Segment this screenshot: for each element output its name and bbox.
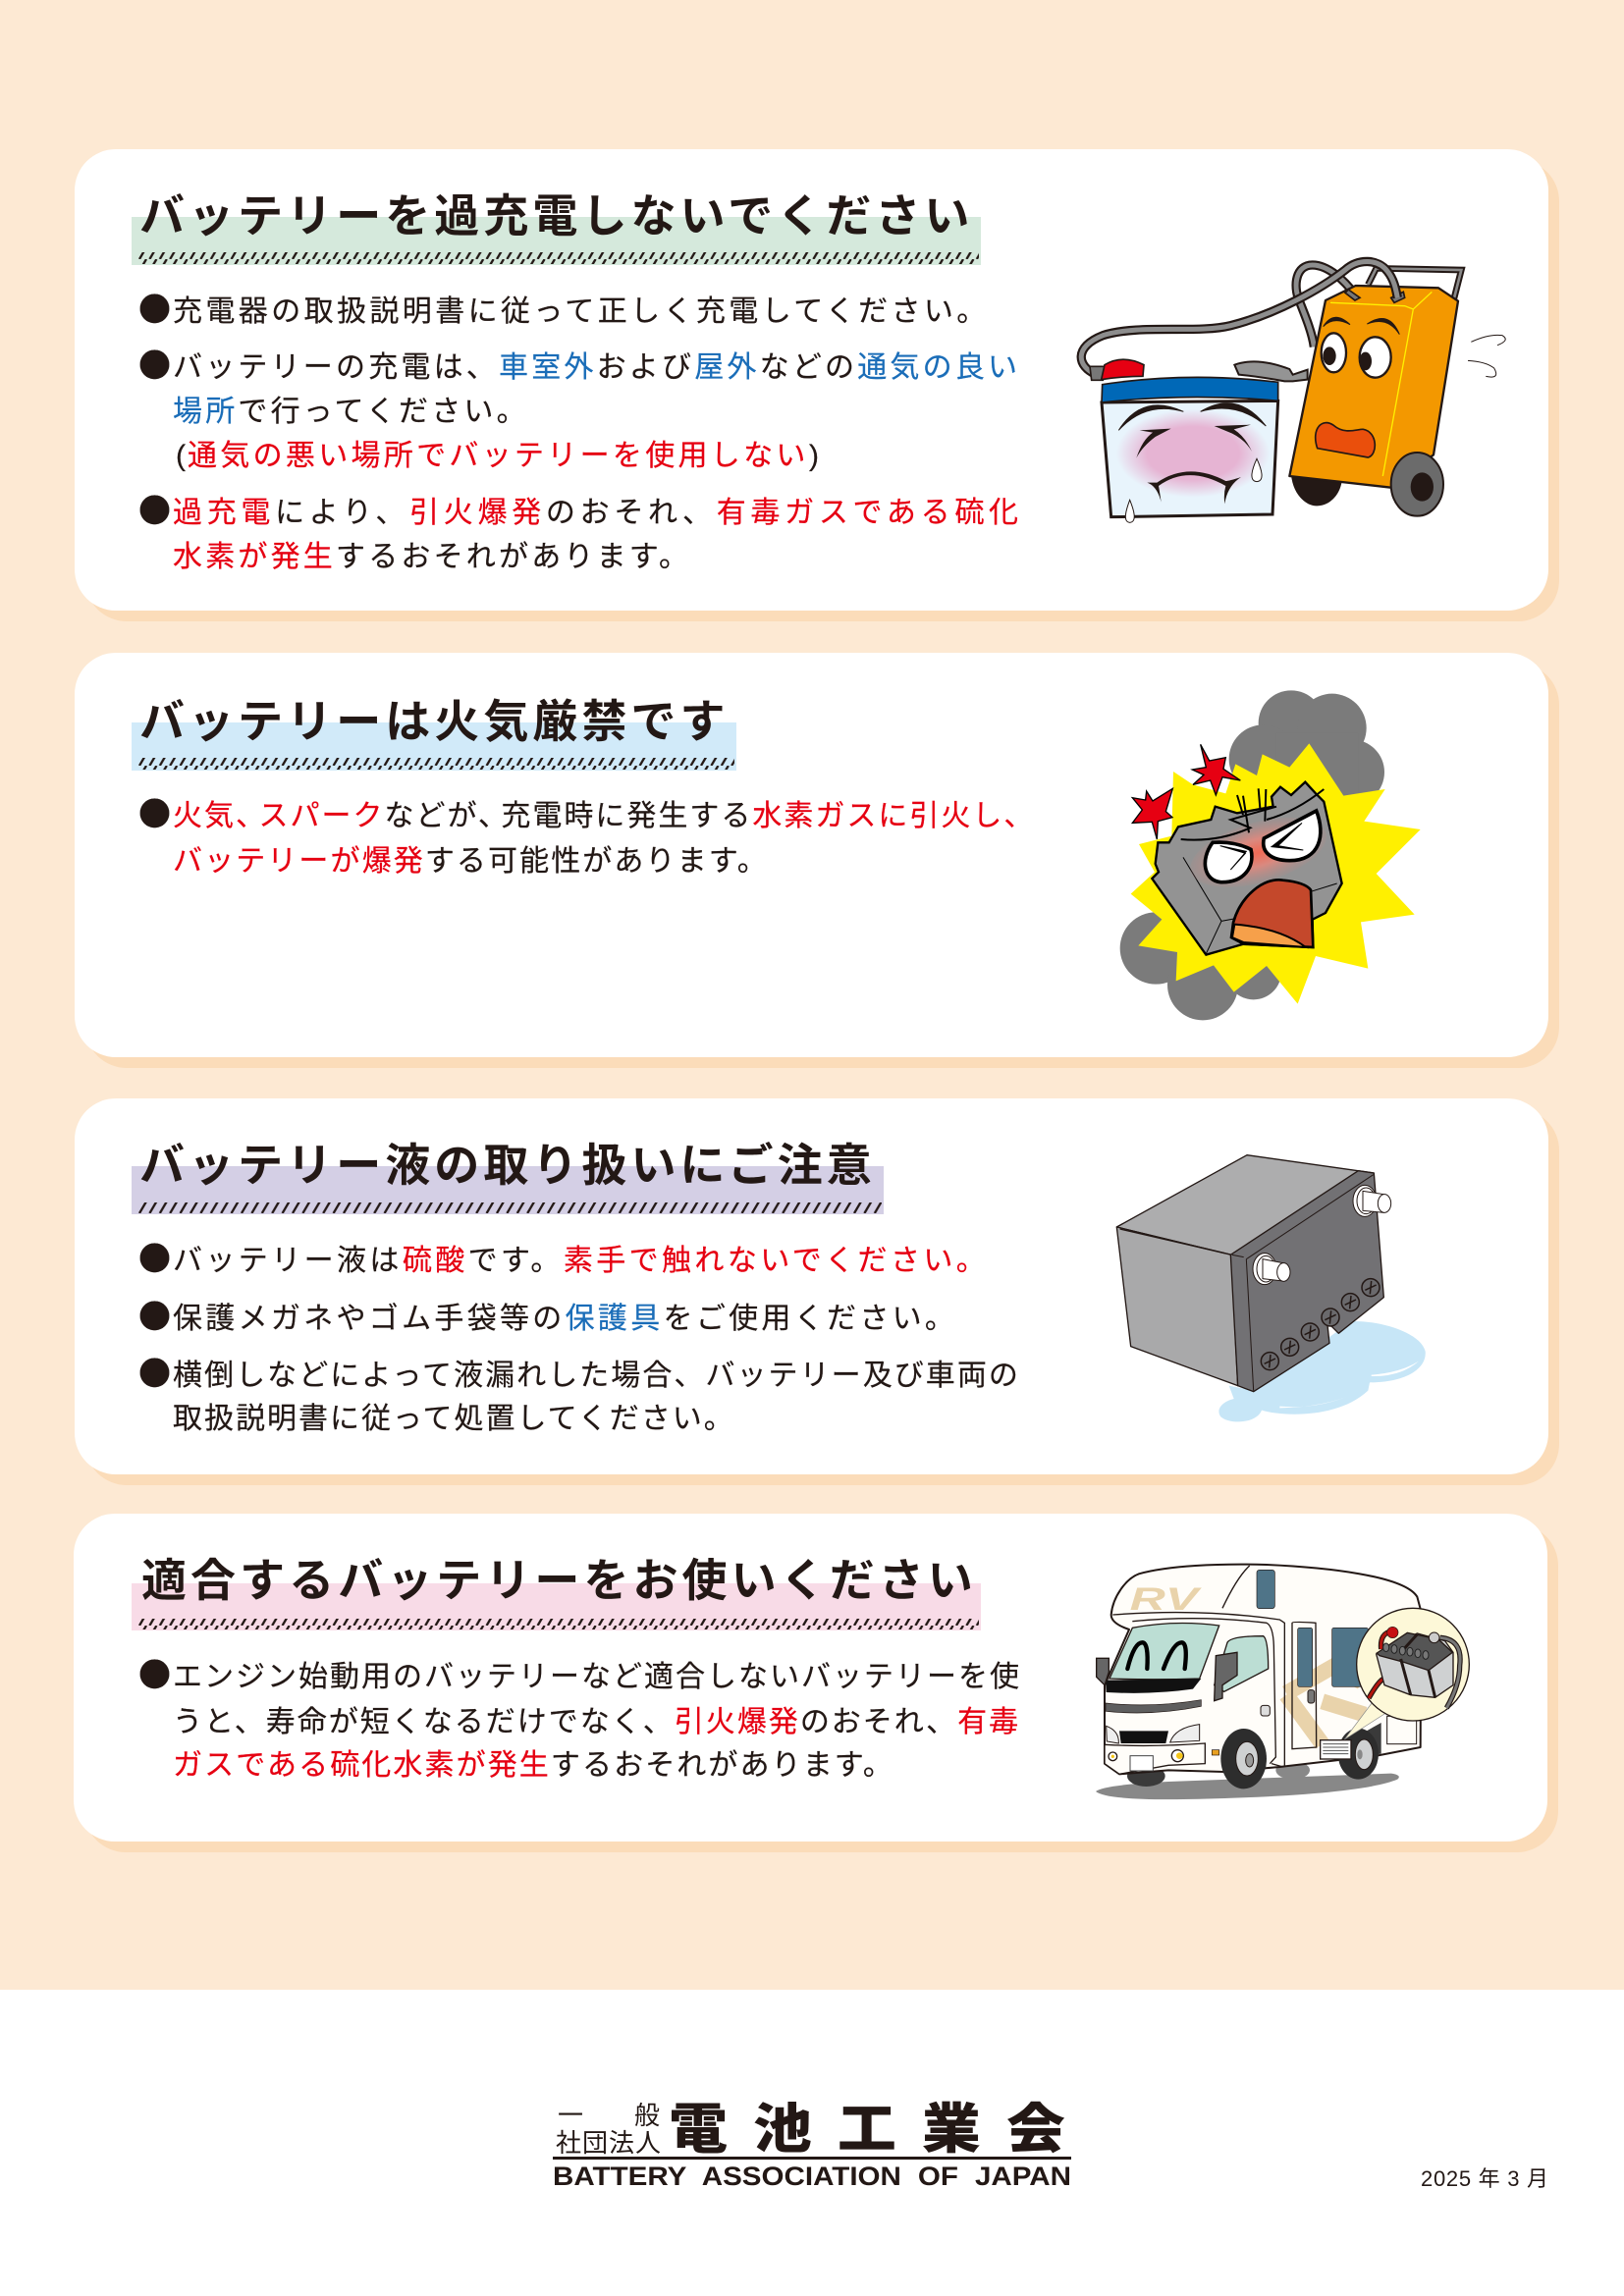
callout pointer [1344, 1701, 1386, 1739]
battery body [1102, 400, 1278, 517]
bullet list: により、引火爆発のおそれ、有毒ガスである硫化 [275, 497, 1023, 529]
bullet list: 火気、 [173, 800, 267, 832]
heading: バッテリー液の取り扱いにご注意 [139, 1140, 876, 1191]
bullet list: ) [809, 440, 822, 472]
over cab lines [1112, 1566, 1284, 1767]
bullet list: 充電器の取扱説明書に従って正しく充電してください。 [173, 295, 990, 328]
panel: do not overcharge [75, 149, 1559, 621]
logo english: BATTERY ASSOCIATION OF JAPAN [553, 2162, 1071, 2191]
logo name: 電池工業会 [669, 2100, 1091, 2160]
bullet list: ● [138, 1291, 171, 1338]
front wheel [1391, 453, 1443, 516]
back wheel [1291, 474, 1342, 506]
illustration: exploding battery [1120, 690, 1421, 1020]
burst [1131, 743, 1421, 1004]
ground shadow [1096, 1774, 1399, 1799]
bullet list: ガスである硫化水素が発生するおそれがあります。 [173, 1749, 894, 1782]
heading band [132, 1166, 884, 1214]
connectors [1345, 290, 1405, 302]
bullet list [138, 1649, 1021, 1782]
bullet list [138, 788, 1035, 878]
heading band [132, 217, 981, 265]
van body [1105, 1565, 1421, 1774]
bullet list: ● [138, 1233, 171, 1280]
bullet list: 過充電 [173, 497, 275, 529]
panel: battery fluid [75, 1098, 1559, 1485]
battery face [1118, 403, 1266, 430]
bullet list: バッテリーの充電は、 [173, 351, 499, 384]
brows [1181, 788, 1324, 840]
bullet list: ● [138, 1348, 171, 1395]
bullet list: バッテリーが爆発する可能性があります。 [173, 845, 769, 878]
bullet list: ● [138, 340, 171, 387]
hose front [1081, 261, 1397, 375]
rear windows [1257, 1570, 1368, 1686]
logo prefix: 般 [634, 2101, 660, 2130]
bullet list [138, 284, 1023, 573]
eyes [1205, 842, 1252, 882]
heading: バッテリーは火気厳禁です [139, 696, 730, 747]
bullet list: 場所で行ってください。 [173, 396, 529, 428]
bullet list: 通気の悪い場所でバッテリーを使用しない [188, 440, 809, 472]
bullet list: エンジン始動用のバッテリーなど適合しないバッテリーを使 [173, 1661, 1021, 1693]
footer background [0, 1990, 1624, 2296]
red sparks [1192, 744, 1240, 795]
bumper [1105, 1743, 1205, 1774]
side face [1116, 1227, 1238, 1386]
battery lid [1102, 377, 1278, 402]
logo prefix [556, 2101, 662, 2158]
side mirrors [1215, 1652, 1237, 1701]
blush [1116, 409, 1270, 498]
rage blush [1182, 804, 1334, 901]
bullet list: うと、寿命が短くなるだけでなく、引火爆発のおそれ、有毒 [173, 1706, 1020, 1738]
under wheels [1127, 1766, 1165, 1787]
bullet list [138, 1233, 1020, 1435]
bullet list: ● [138, 1649, 171, 1696]
door handle [1261, 1705, 1270, 1716]
front face [1230, 1171, 1383, 1392]
heading band [132, 722, 736, 771]
bullet list: ( [176, 440, 189, 472]
bullet list: 保護具をご使用ください。 [566, 1303, 957, 1335]
terminals [1253, 1185, 1391, 1285]
charger eyes [1322, 333, 1346, 372]
puddle [1218, 1321, 1426, 1421]
panel: suitable battery [74, 1514, 1558, 1852]
smoke [1120, 690, 1384, 1020]
cart handle [1368, 268, 1461, 299]
fog lights [1109, 1752, 1117, 1761]
heading: バッテリーを過充電しないでください [139, 190, 973, 241]
bullet list: 取扱説明書に従って処置してください。 [173, 1403, 735, 1435]
hose behind [1296, 265, 1355, 347]
logo prefix: 社団法人 [556, 2128, 662, 2158]
tears [1125, 458, 1262, 522]
bullet list: 保護メガネやゴム手袋等の [173, 1303, 566, 1335]
heading band [132, 1583, 981, 1630]
bullet list: バッテリー液は [173, 1245, 403, 1277]
bullet list: 硫酸です。素手で触れないでください。 [403, 1245, 989, 1277]
left clamp [1090, 366, 1105, 380]
logo prefix: 一 [558, 2101, 583, 2130]
bullet list: スパークなどが、充電時に発生する水素ガスに引火し、 [259, 800, 1035, 832]
red terminal [1102, 359, 1144, 380]
caps [1261, 1279, 1380, 1370]
rear hatch [1387, 1716, 1417, 1744]
windshield [1110, 1623, 1219, 1680]
illustration: charger and battery [1081, 261, 1505, 522]
callout battery [1377, 1633, 1453, 1697]
bullet list: 車室外および屋外などの通気の良い [499, 351, 1020, 384]
vent [1321, 1740, 1351, 1759]
van eyes [1127, 1642, 1186, 1669]
callout cables [1369, 1631, 1460, 1708]
side window [1215, 1636, 1269, 1691]
door [1292, 1622, 1317, 1749]
top face [1116, 1155, 1374, 1255]
front wheel [1222, 1735, 1266, 1767]
heading: 適合するバッテリーをお使いください [141, 1555, 977, 1606]
charger body [1289, 286, 1458, 488]
hood strip [1106, 1679, 1201, 1693]
large R logo [1286, 1667, 1365, 1744]
callout circle [1357, 1608, 1469, 1721]
front grille [1119, 1731, 1168, 1743]
motion lines [1468, 335, 1505, 377]
date: 2025 年 3 月 [1421, 2166, 1548, 2191]
bullet list: 横倒しなどによって液漏れした場合、バッテリー及び車両の [173, 1360, 1020, 1392]
right clamp [1234, 361, 1308, 381]
rear wheel [1355, 1723, 1381, 1757]
panel: no fire [75, 653, 1559, 1068]
illustration: leaking battery [1116, 1155, 1426, 1421]
headlights [1107, 1725, 1200, 1743]
RV text: RV [1130, 1581, 1203, 1617]
illustration: camper van [1096, 1565, 1469, 1799]
bullet list: ● [138, 788, 171, 835]
bullet list: ● [138, 485, 171, 532]
logo: Battery Association of Japan [553, 2100, 1091, 2191]
mouth [1231, 880, 1313, 947]
charger mouth [1316, 423, 1375, 457]
rock body [1152, 782, 1342, 955]
bullet list: 水素が発生するおそれがあります。 [173, 541, 691, 573]
bullet list: ● [138, 284, 171, 331]
